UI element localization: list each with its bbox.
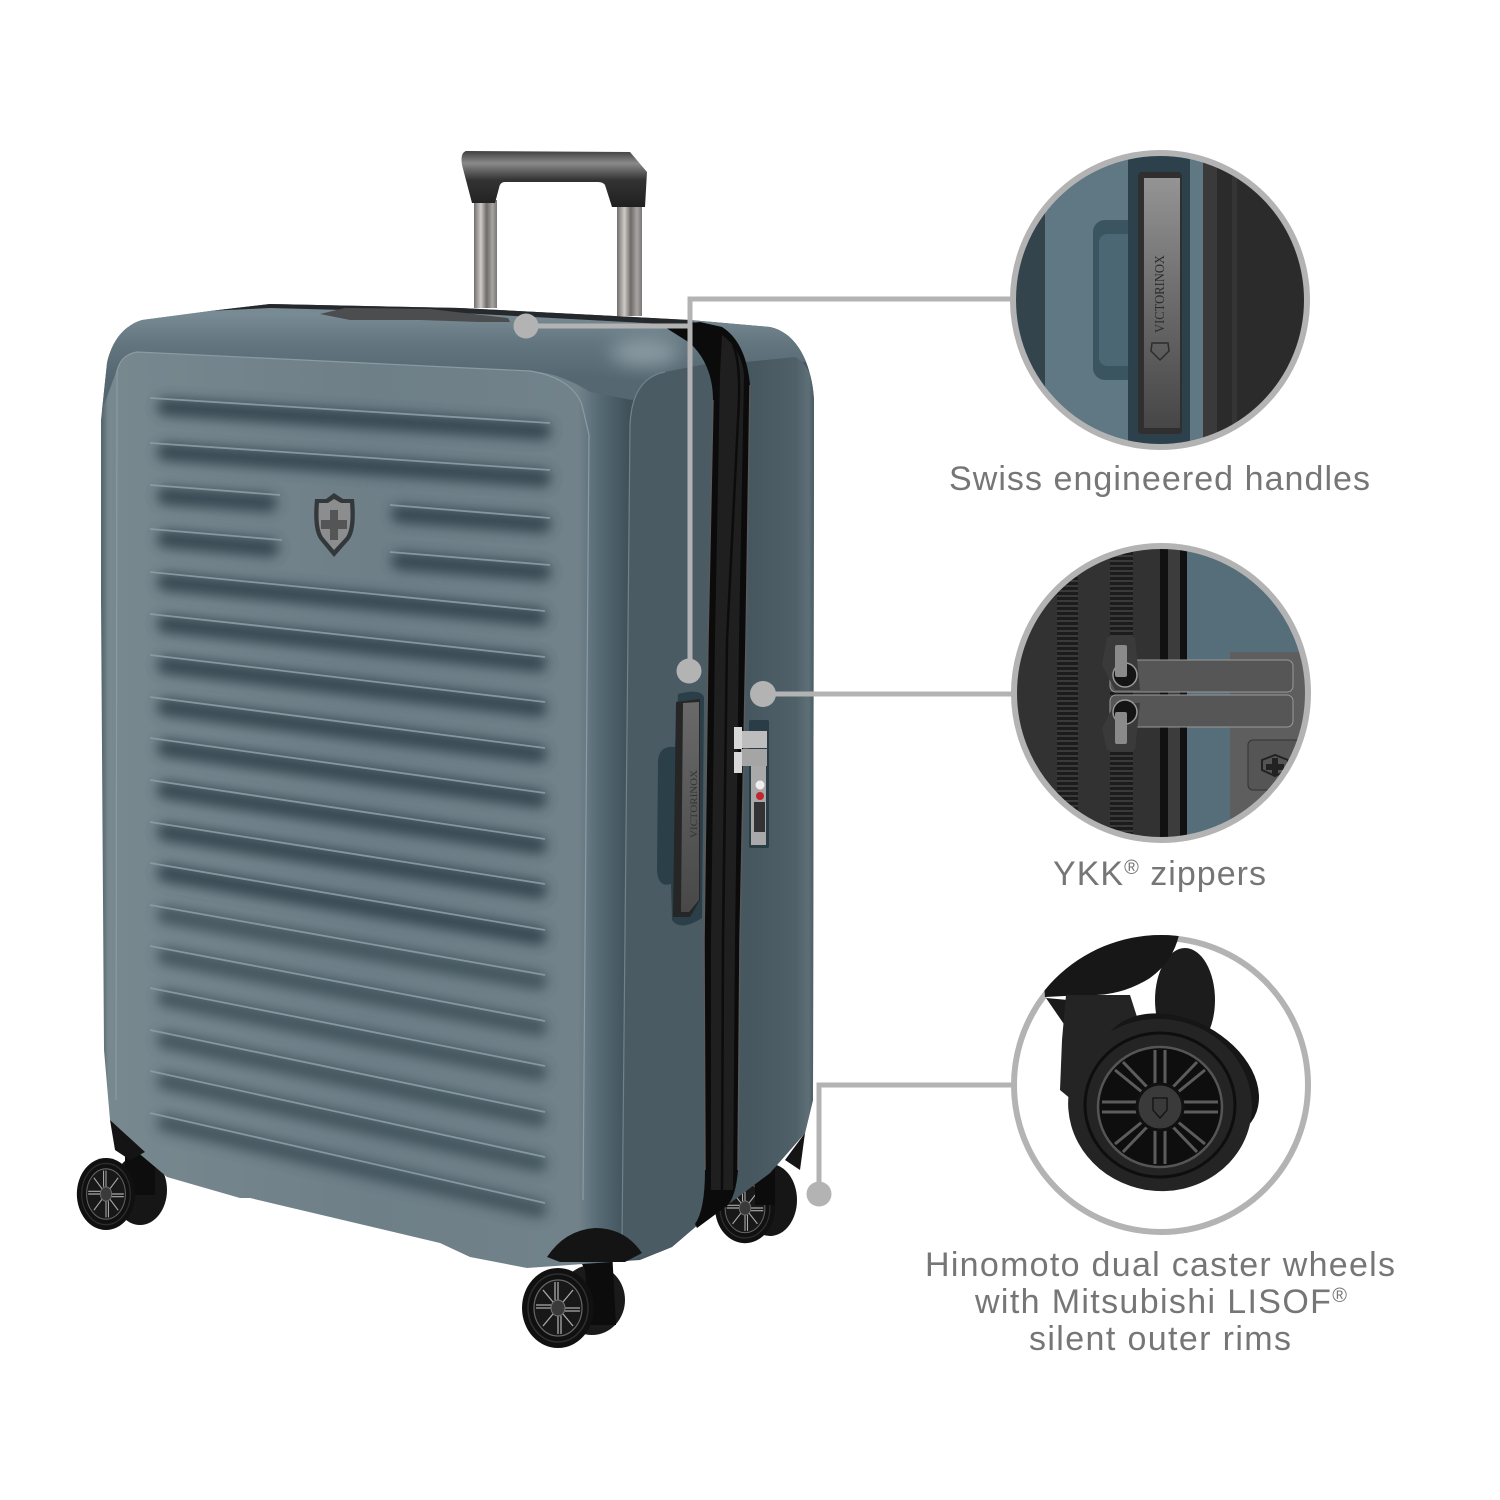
- zipper pull bars: [1110, 660, 1293, 692]
- caption: wheels: [925, 1246, 1395, 1358]
- tire: [1068, 1019, 1252, 1192]
- detail circle: wheels: [1014, 930, 1308, 1232]
- top face highlight: [611, 338, 679, 366]
- ring: [1014, 938, 1308, 1232]
- handle grip: [462, 151, 647, 207]
- front caster wheel: [522, 1250, 625, 1348]
- top carry handle: [320, 308, 510, 322]
- rear caster wheels: [77, 1150, 797, 1243]
- lock plate: [1230, 652, 1305, 820]
- side shell edge: [622, 372, 665, 1240]
- front shell: [95, 300, 820, 1280]
- callout leader lines: [526, 299, 1014, 1194]
- handle bar: [673, 699, 700, 917]
- dark strip: [1203, 150, 1217, 450]
- handle recess and grip: [657, 692, 704, 926]
- dark shell band: [1016, 214, 1045, 386]
- side carry handle: [657, 692, 704, 926]
- grip bump: [1093, 220, 1128, 380]
- rim: [1098, 1047, 1222, 1167]
- rear side shell: [730, 357, 816, 1210]
- handle bar: [1138, 172, 1182, 434]
- emblem on front shell: [314, 493, 355, 557]
- softer lower rib shadows: [166, 915, 538, 1209]
- callout dots: [514, 314, 832, 1206]
- zipper: [663, 322, 750, 1228]
- dark strips: [1160, 545, 1187, 845]
- caption: wheels: ®: [1332, 1285, 1347, 1307]
- caster post: [1060, 995, 1138, 1100]
- zipper sliders: [1110, 637, 1140, 690]
- caption: zippers: zippers: [1140, 855, 1266, 893]
- rib highlights: [150, 398, 550, 1203]
- spokes: [1102, 1050, 1218, 1164]
- ring: [1013, 153, 1307, 447]
- handle poles: [474, 200, 642, 316]
- blue shell: [1045, 159, 1203, 441]
- zipper teeth: [1057, 577, 1078, 810]
- zipper leader: [763, 692, 1014, 696]
- rear wheel: [1155, 948, 1215, 1028]
- telescoping handle: [462, 151, 647, 316]
- fabric: [1217, 168, 1304, 432]
- ring: [1014, 546, 1308, 840]
- handle bar lettering: VICTORINOX: [1153, 255, 1168, 333]
- handle lettering: VICTORINOX: [689, 769, 699, 838]
- caster arm: [1046, 998, 1066, 1024]
- fabric: [1010, 545, 1160, 845]
- detail circle: zippers: [1010, 545, 1315, 852]
- caption: handles: Swiss engineered handles: [949, 460, 1370, 498]
- suitcase body: [95, 300, 830, 1280]
- blurred rib shadows: [166, 407, 542, 936]
- hub: [1137, 1084, 1183, 1130]
- side shell: [626, 364, 709, 1260]
- wheel leader: [819, 1085, 1014, 1194]
- top face: [102, 304, 806, 412]
- handle leader: [690, 299, 1012, 671]
- corner bumpers: [110, 1120, 805, 1262]
- combination lock: [734, 720, 769, 848]
- handle bar emblem: [1151, 343, 1169, 360]
- caster cap: [1044, 935, 1179, 997]
- embossed panel outline: [116, 352, 589, 1200]
- back tire: [1112, 1013, 1259, 1124]
- zipper pulls: [741, 731, 767, 748]
- blue shell: [1187, 551, 1299, 835]
- caption: zippers: ®: [1124, 857, 1139, 879]
- back top edge: [210, 304, 694, 324]
- top handle leader: [526, 324, 690, 328]
- caption: wheels: with Mitsubishi LISOF: [975, 1283, 1331, 1321]
- caption: wheels: Hinomoto dual caster wheels: [925, 1246, 1395, 1284]
- caption: zippers: YKK: [1053, 855, 1123, 893]
- lock emblem button: [1248, 740, 1298, 790]
- detail circle: handle: [1010, 150, 1312, 450]
- handle recess: [1128, 150, 1190, 450]
- suitcase illustration: [77, 151, 830, 1348]
- caption: wheels: silent outer rims: [1029, 1320, 1291, 1358]
